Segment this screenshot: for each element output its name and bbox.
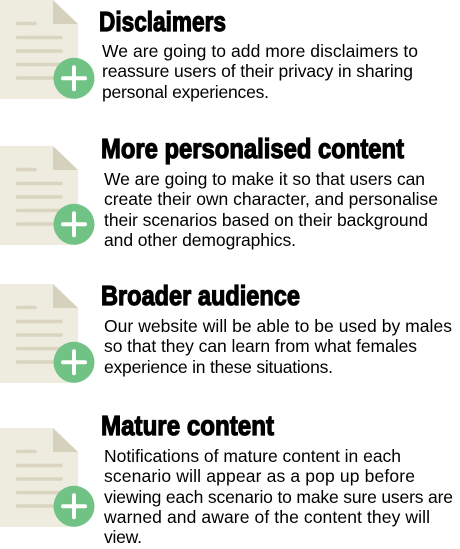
text block: more personalised content <box>104 169 438 250</box>
text block: more personalised content: We are going to make it so that users can <box>104 169 425 189</box>
text block: mature content: warned and aware of the content they will <box>103 507 430 527</box>
text block: disclaimers: We are going to add more disclaimers to <box>102 41 418 61</box>
text block: broader audience: Our website will be able to be used by males <box>104 316 452 336</box>
icon: document with plus <box>0 0 94 99</box>
icon: document with plus <box>0 284 94 383</box>
icon: document with plus <box>0 428 94 527</box>
text block: more personalised content: their scenarios based on their background <box>104 210 428 230</box>
panel: mature content <box>0 410 453 547</box>
panel: more personalised content <box>0 133 438 250</box>
heading: broader audience: Broader audience <box>101 280 300 311</box>
text block: broader audience: experience in these situations. <box>104 357 333 377</box>
text block: broader audience: so that they can learn from what females <box>104 336 417 356</box>
text block: disclaimers: reassure users of their privacy in sharing <box>102 61 413 81</box>
heading: more personalised content: More personalised content <box>101 133 404 164</box>
text block: mature content: scenario will appear as a pop up before <box>104 466 415 486</box>
panel: broader audience <box>0 280 452 383</box>
text block: broader audience <box>104 316 452 377</box>
text block: disclaimers <box>102 41 418 102</box>
icon: document with plus <box>0 146 94 245</box>
text block: mature content <box>103 446 453 547</box>
text block: more personalised content: create their own character, and personalise <box>104 189 438 209</box>
text block: disclaimers: personal experiences. <box>102 82 269 102</box>
panel: disclaimers <box>0 0 418 102</box>
heading: mature content: Mature content <box>101 410 274 441</box>
text block: mature content: view. <box>104 527 142 547</box>
text block: mature content: Notifications of mature content in each <box>104 446 401 466</box>
text block: mature content: viewing each scenario to make sure users are <box>104 487 453 507</box>
heading: disclaimers: Disclaimers <box>99 6 226 37</box>
text block: more personalised content: and other demographics. <box>104 230 296 250</box>
